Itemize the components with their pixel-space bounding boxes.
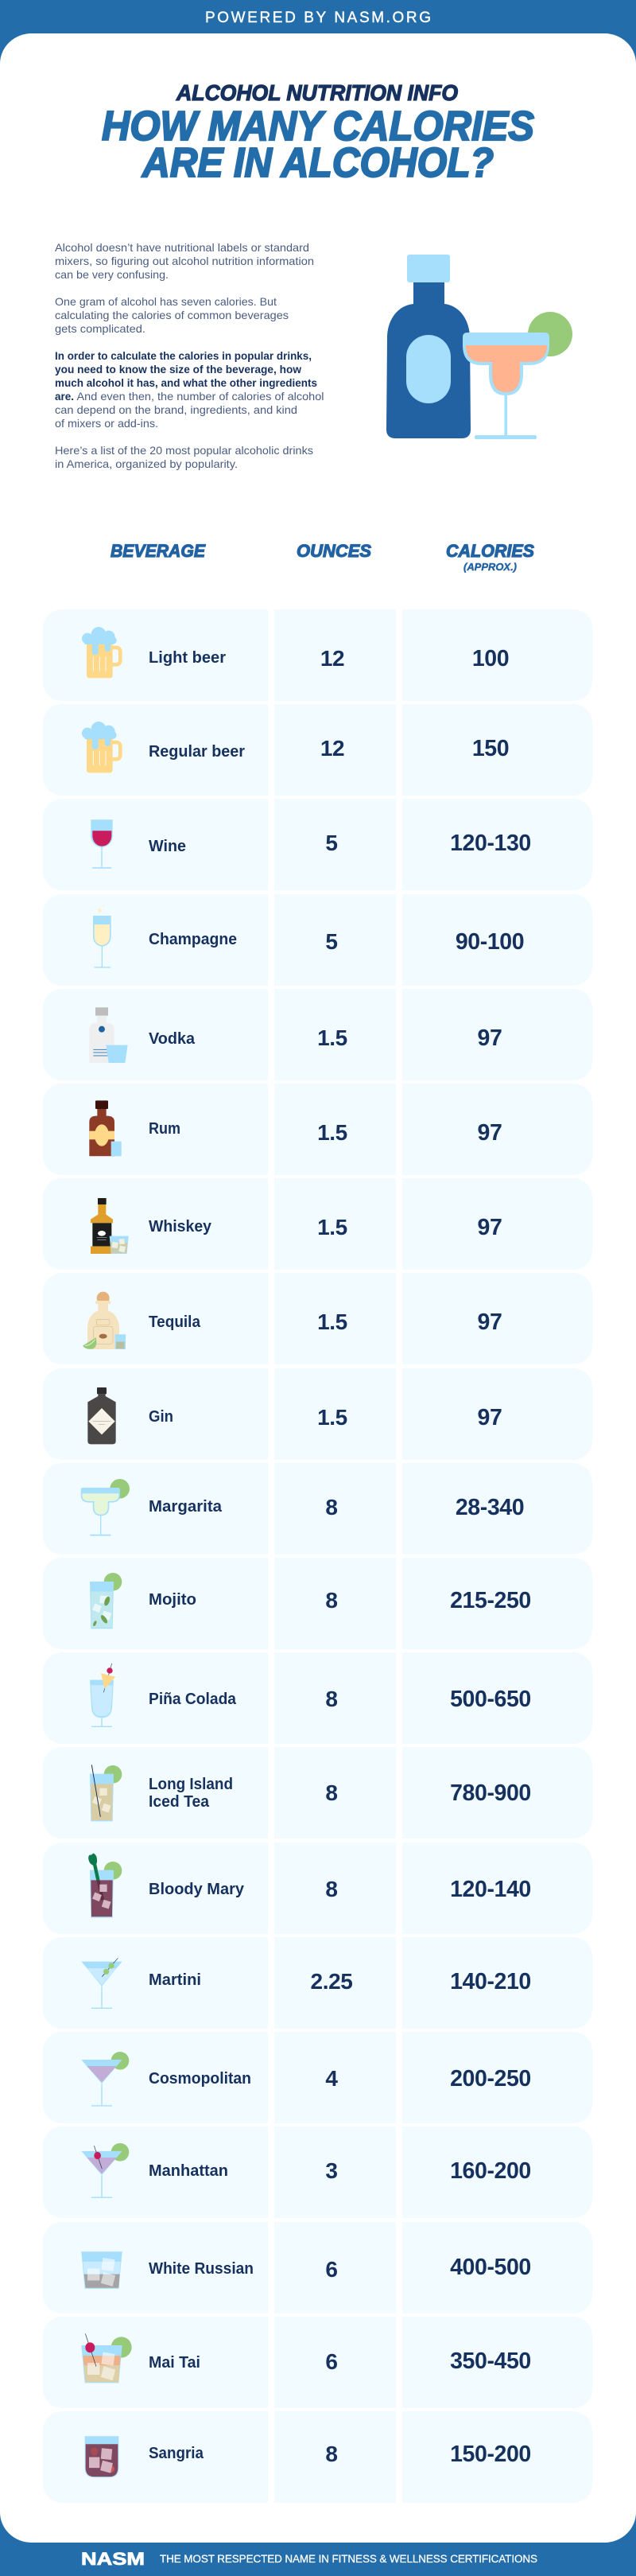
footer logo: NASM xyxy=(81,2549,145,2569)
ounces: 8 xyxy=(325,1687,338,1711)
calories: 100 xyxy=(472,646,509,671)
name: White Russian xyxy=(149,2260,254,2278)
calories: 90-100 xyxy=(456,929,524,955)
row: margarita xyxy=(43,1463,592,1555)
calories: 28-340 xyxy=(456,1495,524,1520)
header: calories: CALORIES xyxy=(446,541,534,561)
icon: martini glass xyxy=(81,1958,122,2008)
header: approx: (APPROX.) xyxy=(463,561,517,573)
icon: champagne flute xyxy=(93,905,111,967)
ounces: 2.25 xyxy=(311,1969,352,1994)
intro text: can be very confusing. xyxy=(55,268,169,281)
ounces: 12 xyxy=(320,646,344,671)
icon: mai tai glass xyxy=(81,2333,132,2383)
row: white russian xyxy=(43,2222,592,2313)
row: tequila xyxy=(43,1273,592,1364)
title line 1: HOW MANY CALORIES xyxy=(102,103,534,150)
title kicker: ALCOHOL NUTRITION INFO xyxy=(176,80,458,105)
name: Mojito xyxy=(149,1591,196,1609)
ounces: 5 xyxy=(325,831,338,855)
intro text: gets complicated. xyxy=(55,322,145,335)
calories: 140-210 xyxy=(450,1969,531,1994)
intro text: are. xyxy=(55,390,74,403)
calories: 500-650 xyxy=(450,1687,531,1712)
name: Sangria xyxy=(149,2445,204,2462)
row: rum xyxy=(43,1084,592,1175)
name: Manhattan xyxy=(149,2162,228,2180)
calories: 120-140 xyxy=(450,1877,531,1902)
row: mojito xyxy=(43,1558,592,1649)
calories: 97 xyxy=(478,1215,502,1240)
intro text xyxy=(55,241,324,470)
row: regular beer xyxy=(43,704,592,796)
ounces: 1.5 xyxy=(317,1120,347,1145)
icon: vodka bottle xyxy=(89,1007,128,1063)
icon: bloody mary glass xyxy=(88,1853,122,1918)
icon: beer mug xyxy=(82,722,120,772)
ounces: 3 xyxy=(325,2158,338,2183)
calories: 97 xyxy=(478,1405,502,1430)
ounces: 6 xyxy=(325,2257,338,2282)
row: wine xyxy=(43,799,592,890)
calories: 150 xyxy=(472,736,509,761)
icon: pina colada glass xyxy=(90,1664,115,1726)
ounces: 8 xyxy=(325,1495,338,1520)
footer tagline: THE MOST RESPECTED NAME IN FITNESS & WELLNESS CERTIFICATIONS xyxy=(160,2553,537,2565)
row: bloody mary xyxy=(43,1843,592,1934)
ounces: 1.5 xyxy=(317,1215,347,1239)
icon: margarita glass xyxy=(81,1479,130,1535)
top banner text: POWERED BY NASM.ORG xyxy=(205,10,431,26)
name: Tequila xyxy=(149,1313,201,1331)
intro text: Alcohol doesn’t have nutritional labels or standard xyxy=(55,241,309,254)
name: Wine xyxy=(149,838,186,855)
name: Bloody Mary xyxy=(149,1881,245,1898)
row: martini xyxy=(43,1937,592,2029)
ounces: 1.5 xyxy=(317,1405,347,1430)
name: Mai Tai xyxy=(149,2354,200,2372)
header: beverage: BEVERAGE xyxy=(111,541,206,561)
calories: 97 xyxy=(478,1120,502,1146)
icon: wine glass xyxy=(91,819,113,868)
icon: whiskey bottle xyxy=(91,1198,129,1254)
intro text: One gram of alcohol has seven calories. But xyxy=(55,295,277,308)
table headers xyxy=(111,541,534,573)
row: cosmopolitan xyxy=(43,2032,592,2123)
ounces: 4 xyxy=(325,2066,338,2091)
intro text: much alcohol it has, and what the other ingredients xyxy=(55,376,317,389)
calories: 97 xyxy=(478,1025,502,1051)
icon: cosmopolitan glass xyxy=(81,2052,129,2106)
icon: sangria glass xyxy=(85,2436,118,2477)
row: mai tai xyxy=(43,2317,592,2408)
row: whiskey xyxy=(43,1178,592,1270)
ounces: 6 xyxy=(325,2349,338,2374)
row: long island iced tea xyxy=(43,1747,592,1839)
row: champagne xyxy=(43,894,592,986)
row: sangria xyxy=(43,2411,592,2503)
intro text: can depend on the brand, ingredients, and kind xyxy=(55,403,297,416)
calories: 120-130 xyxy=(450,831,531,856)
calories: 400-500 xyxy=(450,2255,531,2280)
calories: 780-900 xyxy=(450,1780,531,1806)
ounces: 12 xyxy=(320,736,344,761)
title line 2: ARE IN ALCOHOL? xyxy=(141,140,494,186)
calories: 150-200 xyxy=(450,2442,531,2467)
intro text: Here’s a list of the 20 most popular alcoholic drinks xyxy=(55,444,313,457)
row: manhattan xyxy=(43,2127,592,2218)
icon: tequila bottle xyxy=(83,1292,126,1349)
ounces: 5 xyxy=(325,929,338,954)
name: Rum xyxy=(149,1120,180,1138)
header: ounces: OUNCES xyxy=(297,541,371,561)
icon: long island glass xyxy=(90,1765,122,1821)
calories: 200-250 xyxy=(450,2066,531,2092)
name: Regular beer xyxy=(149,743,245,761)
intro text: mixers, so figuring out alcohol nutrition information xyxy=(55,255,314,267)
name: Light beer xyxy=(149,649,226,667)
intro text: you need to know the size of the beverage, how xyxy=(55,363,301,376)
name: Margarita xyxy=(149,1498,223,1516)
icon: mojito glass xyxy=(90,1573,122,1628)
ounces: 8 xyxy=(325,1780,338,1805)
intro text: of mixers or add-ins. xyxy=(55,417,158,430)
row: gin xyxy=(43,1368,592,1460)
calories: 97 xyxy=(478,1309,502,1335)
calories: 160-200 xyxy=(450,2158,531,2184)
icon: white russian glass xyxy=(81,2251,122,2289)
title xyxy=(102,80,534,186)
icon: bottle and margarita hero xyxy=(386,255,572,439)
name: Long Island xyxy=(149,1776,233,1793)
intro text: calculating the calories of common beverages xyxy=(55,309,289,321)
row: pina colada xyxy=(43,1652,592,1744)
icon: manhattan glass xyxy=(81,2143,129,2197)
ounces: 8 xyxy=(325,1588,338,1613)
calories: 215-250 xyxy=(450,1588,531,1613)
icon: gin bottle xyxy=(87,1387,116,1444)
name: Gin xyxy=(149,1408,173,1426)
ounces: 1.5 xyxy=(317,1025,347,1050)
name: Piña Colada xyxy=(149,1691,237,1708)
intro text: in America, organized by popularity. xyxy=(55,457,238,470)
name: Whiskey xyxy=(149,1218,212,1235)
calories: 350-450 xyxy=(450,2348,531,2374)
ounces: 8 xyxy=(325,2442,338,2466)
name: Martini xyxy=(149,1971,201,1989)
ounces: 1.5 xyxy=(317,1309,347,1334)
row: vodka xyxy=(43,989,592,1080)
ounces: 8 xyxy=(325,1877,338,1901)
icon: beer mug xyxy=(82,627,120,678)
intro text: And even then, the number of calories of alcohol xyxy=(76,390,324,403)
name: Vodka xyxy=(149,1030,196,1048)
icon: rum bottle xyxy=(89,1100,122,1156)
name xyxy=(149,1776,233,1811)
row: light beer xyxy=(43,609,592,701)
intro text: In order to calculate the calories in popular drinks, xyxy=(55,349,312,362)
name: Iced Tea xyxy=(149,1793,210,1811)
name: Champagne xyxy=(149,931,237,948)
name: Cosmopolitan xyxy=(149,2070,251,2088)
